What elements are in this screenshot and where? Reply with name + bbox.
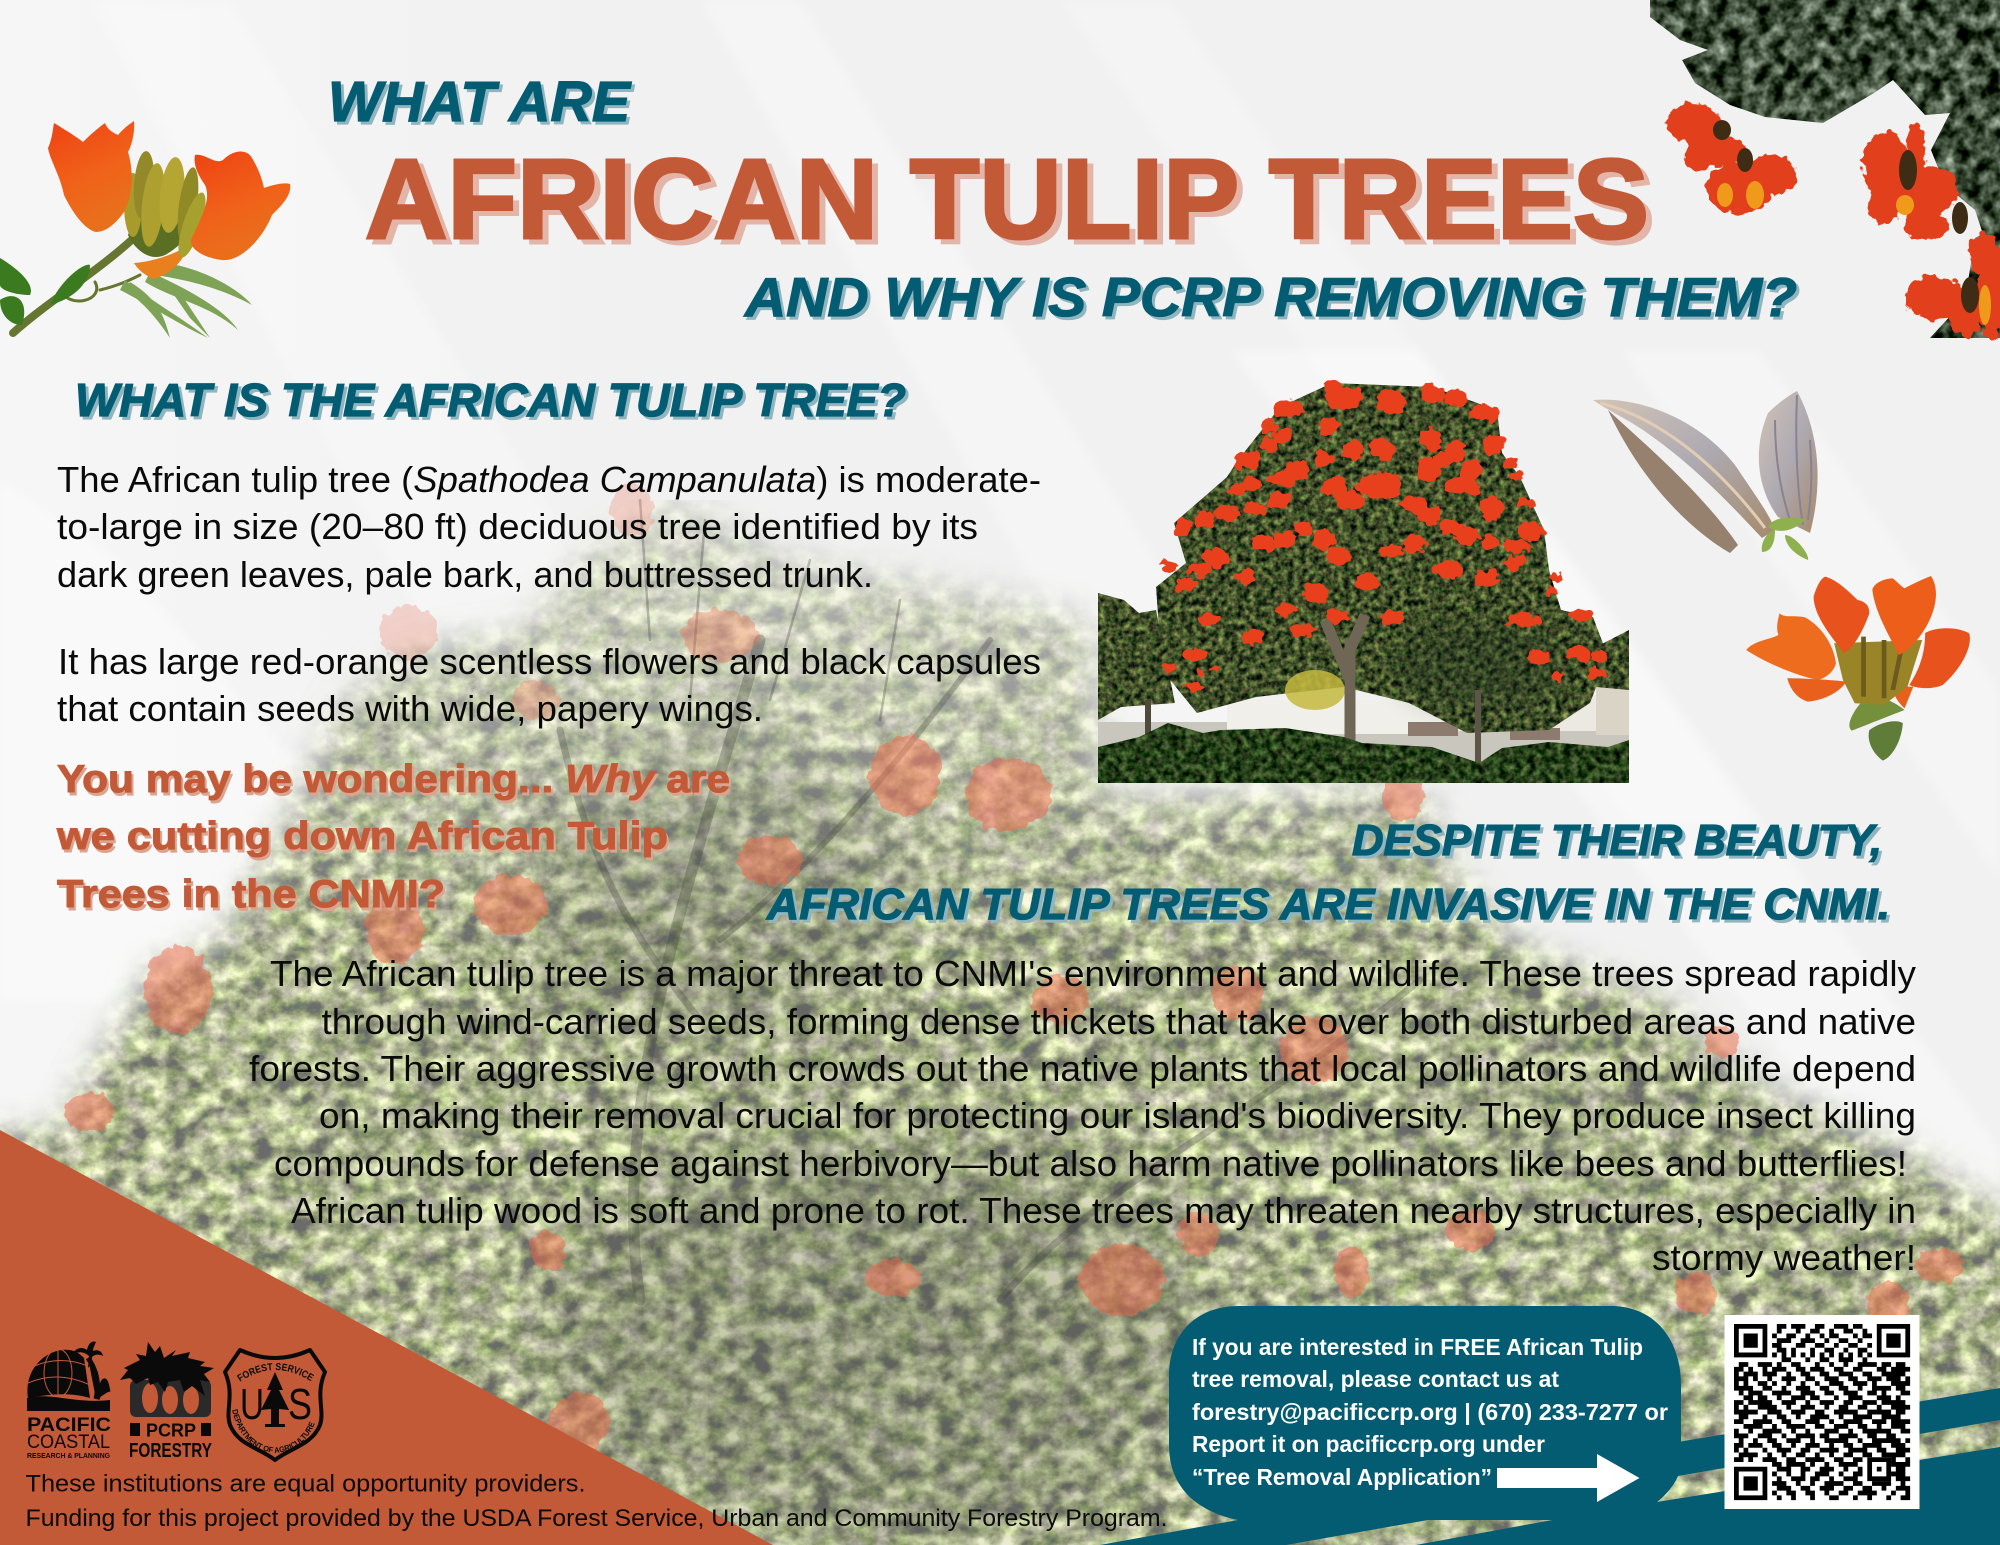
faded background tree photo (0, 484, 2000, 1545)
text block: description: The African tulip tree (Spathodea Campanulata) is moderate- (57, 459, 1041, 500)
icon: tulip flower top left (0, 121, 290, 338)
text block: contact details: “Tree Removal Application” (1192, 1464, 1492, 1490)
logo: pcrp forestry: FORESTRY (129, 1440, 213, 1462)
text block: description: It has large red-orange scentless flowers and black capsules (58, 641, 1041, 682)
panel: orange corner (0, 1130, 773, 1545)
logo: pacific coastal research and planning: COASTAL (27, 1432, 110, 1453)
text block: funding statement: These institutions are equal opportunity providers. (26, 1470, 586, 1498)
panel: contact bubble with teal bands (1100, 1306, 2000, 1545)
icon: single flower right (1746, 576, 1970, 761)
text block: description: that contain seeds with wide, papery wings. (57, 688, 763, 729)
text block: why invasive: forests. Their aggressive growth crowds out the native plants that local pollinators and wildlife depend (249, 1048, 1916, 1089)
text block: description (57, 459, 1041, 729)
logo: pacific coastal research and planning: PACIFIC (27, 1415, 111, 1436)
heading: despite their beauty: DESPITE THEIR BEAUTY, (1352, 816, 1882, 865)
logo: us forest service shield: S (288, 1380, 312, 1429)
logo: us forest service shield (223, 1348, 327, 1462)
heading: what is the african tulip tree: WHAT IS THE AFRICAN TULIP TREE? (75, 374, 906, 426)
text block: contact details: Report it on pacificcrp.org under (1192, 1431, 1545, 1457)
logo: us forest service shield: FOREST SERVICE (236, 1363, 314, 1382)
photo: flowering african tulip tree (1098, 379, 1629, 783)
text block: why invasive (249, 953, 1916, 1278)
text block: why invasive: stormy weather! (1652, 1237, 1916, 1278)
logo: pacific coastal research and planning: RESEARCH & PLANNING (27, 1453, 111, 1460)
logo: us forest service shield: U (240, 1380, 264, 1429)
qr code (1724, 1315, 1920, 1509)
text block: funding statement (26, 1470, 1168, 1532)
title (328, 70, 1797, 328)
text block: contact details: If you are interested in FREE African Tulip (1192, 1334, 1643, 1360)
text block: why invasive: compounds for defense against herbivory—but also harm native pollinators like bees and butterflies! (274, 1143, 1907, 1184)
logo: us forest service shield: DEPARTMENT OF AGRICULTURE (232, 1409, 315, 1454)
icon: seed pods (1593, 391, 1818, 560)
heading: despite their beauty (766, 816, 1890, 929)
text block: contact details: forestry@pacificcrp.org | (670) 233-7277 or (1192, 1399, 1668, 1425)
text block: description: to-large in size (20–80 ft) deciduous tree identified by its (57, 506, 978, 547)
text block: why invasive: African tulip wood is soft and prone to rot. These trees may threaten nearby structures, especially in (291, 1190, 1916, 1231)
callout: you may be wondering: Trees in the CNMI? (57, 873, 445, 916)
callout: you may be wondering (56, 758, 730, 916)
title line: why removing: AND WHY IS PCRP REMOVING THEM? (743, 266, 1797, 328)
text block: why invasive: through wind-carried seeds, forming dense thickets that take over both disturbed areas and native (322, 1001, 1916, 1042)
text block: contact details: tree removal, please contact us at (1192, 1366, 1559, 1392)
title line: african tulip trees: AFRICAN TULIP TREES (365, 136, 1649, 262)
title line: what are: WHAT ARE (328, 70, 632, 134)
arrow: toward qr code (1497, 1454, 1640, 1502)
logo: pcrp forestry (120, 1342, 214, 1462)
logo: pcrp forestry: PCRP (146, 1420, 196, 1440)
logo: pacific coastal research and planning (27, 1341, 111, 1460)
text block: why invasive: on, making their removal crucial for protecting our island's biodiversity. They produce insect killing (319, 1095, 1916, 1136)
callout: you may be wondering: You may be wondering... Why are (57, 758, 730, 801)
heading: despite their beauty: AFRICAN TULIP TREES ARE INVASIVE IN THE CNMI. (766, 880, 1890, 929)
text block: why invasive: The African tulip tree is a major threat to CNMI's environment and wildlife. These trees spread rapidly (270, 953, 1916, 994)
callout: you may be wondering: we cutting down African Tulip (56, 815, 668, 858)
text block: description: dark green leaves, pale bark, and buttressed trunk. (57, 554, 873, 595)
text block: funding statement: Funding for this project provided by the USDA Forest Service, Urban and Community Forestry Program. (26, 1505, 1168, 1532)
icon: foliage and flowers top right (1650, 0, 2000, 340)
text block: contact details (1192, 1334, 1668, 1490)
